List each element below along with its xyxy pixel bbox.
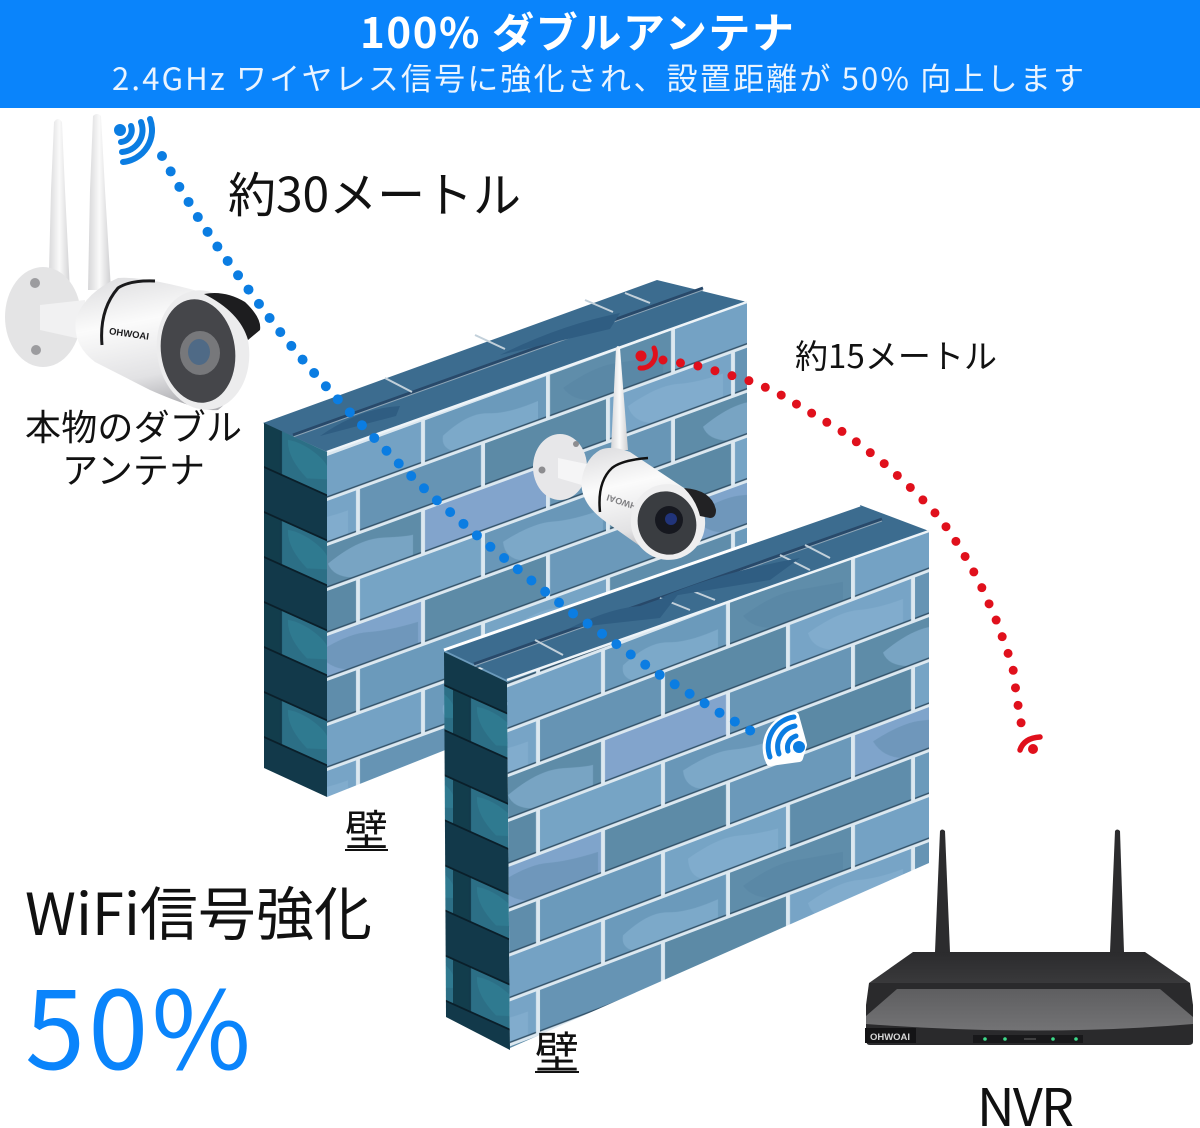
NVR right antenna	[1110, 830, 1124, 952]
NVR LEDs	[973, 1035, 1083, 1043]
camera hood	[204, 293, 260, 340]
NVR front	[866, 983, 1193, 1045]
NVR left antenna	[935, 830, 950, 952]
label: 30 metres: 約30メートル	[228, 156, 521, 226]
label: wifi signal boost: WiFi信号強化	[25, 868, 372, 952]
back wall front face	[327, 302, 747, 797]
NVR logo: OHWOAI	[870, 1032, 910, 1043]
label: real dual antenna: アンテナ	[62, 442, 205, 494]
small camera mounted on wall	[533, 346, 716, 570]
dual antenna camera	[5, 114, 260, 416]
brand label: OHWOAI	[108, 326, 150, 343]
small camera hood	[684, 488, 716, 518]
back wall side face	[264, 423, 327, 797]
NVR recorder	[865, 830, 1193, 1045]
mount plate	[5, 267, 85, 367]
front wall side face	[444, 652, 510, 1050]
rear antenna two	[88, 114, 111, 290]
icon: blue wifi top left	[114, 119, 152, 162]
camera front	[149, 284, 257, 416]
back wall top face	[263, 280, 747, 452]
front wall front face	[507, 531, 929, 1048]
red signal dots	[663, 360, 1022, 728]
wall plate	[533, 434, 596, 500]
back brick wall	[263, 280, 747, 797]
camera barrel	[75, 278, 244, 410]
blue signal dots	[162, 156, 758, 735]
camera brand: OHWOAI	[605, 492, 645, 514]
small camera front	[620, 474, 716, 570]
subtitle: 2.4GHz ワイヤレス信号に強化され、設置距離が 50% 向上します	[112, 54, 1084, 99]
NVR panel	[866, 989, 1193, 1030]
label: wall one: 壁	[345, 797, 388, 859]
NVR logo	[865, 1028, 916, 1043]
big number 50%: 50%	[25, 945, 251, 1101]
icon: blue wifi on wall	[767, 716, 805, 762]
small camera body	[582, 448, 701, 559]
NVR top	[869, 952, 1190, 983]
small camera antenna	[611, 346, 628, 450]
label: real dual antenna: 本物のダブル	[25, 399, 242, 451]
label: real dual antenna	[25, 399, 242, 494]
front wall top face	[444, 505, 929, 680]
header banner	[0, 0, 1200, 108]
label: wall two: 壁	[535, 1017, 579, 1081]
front brick wall	[444, 505, 929, 1050]
icon: red wifi bottom	[1020, 737, 1040, 754]
label: 15 metres: 約15メートル	[795, 330, 997, 378]
title: 100% ダブルアンテナ	[360, 0, 794, 61]
rear antenna one	[48, 119, 71, 312]
icon: red wifi top	[636, 348, 655, 368]
